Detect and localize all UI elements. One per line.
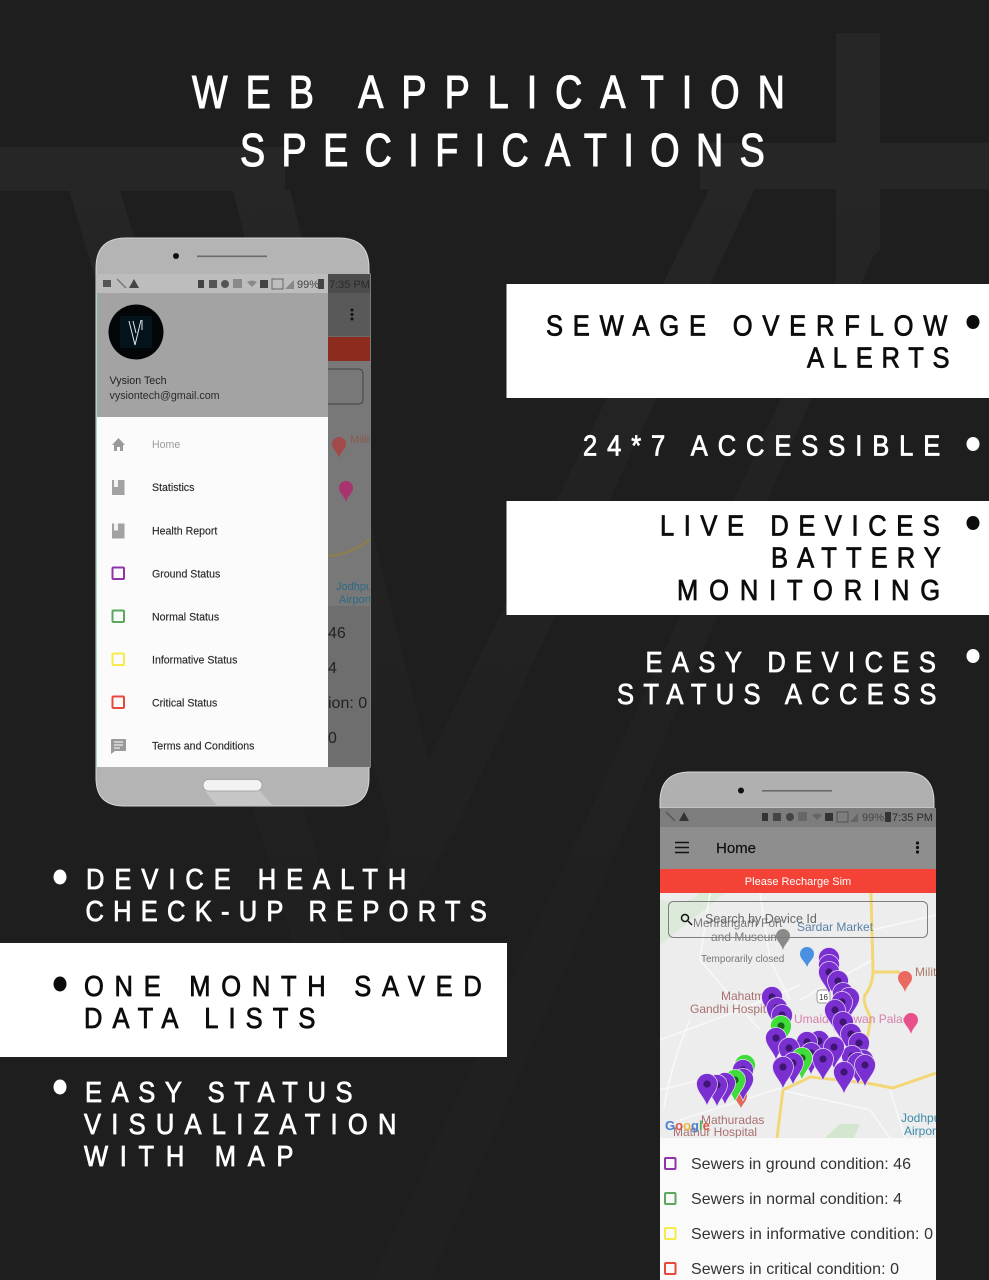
map place labels: Milit bbox=[915, 965, 937, 979]
title: WEB APPLICATION bbox=[192, 66, 785, 118]
dimmed app screen behind drawer: 7:35 PM bbox=[329, 279, 370, 291]
map place labels: Mathur Hospital bbox=[673, 1125, 757, 1139]
sewer counts panel bbox=[660, 1138, 936, 1280]
phone: home map screen bbox=[660, 772, 940, 1280]
map place labels: Jodhpu bbox=[901, 1111, 940, 1125]
recharge banner bbox=[660, 869, 936, 893]
dimmed app screen behind drawer: 0 bbox=[328, 730, 337, 747]
feature: sewage overflow alerts: SEWAGE OVERFLOW bbox=[546, 309, 947, 342]
informative status item: Informative Status bbox=[152, 654, 237, 666]
map place labels: Temporarily closed bbox=[701, 954, 784, 965]
normal status item: Normal Status bbox=[152, 612, 219, 624]
feature: live devices battery monitoring: LIVE DEVICES bbox=[660, 509, 940, 542]
map place labels: Sardar Market bbox=[797, 920, 874, 934]
normal count: Sewers in normal condition: 4 bbox=[691, 1191, 902, 1208]
map place labels bbox=[665, 916, 940, 1139]
map place labels: Mehrangarh Fort bbox=[693, 916, 783, 930]
terms item: Terms and Conditions bbox=[152, 740, 254, 752]
dimmed app screen behind drawer: Jodhpu bbox=[336, 581, 372, 593]
feature: easy status visualization with map: VISUALIZATION bbox=[84, 1107, 396, 1140]
status bar: 99% bbox=[862, 812, 884, 824]
feature: one month saved data lists bbox=[0, 943, 507, 1057]
status bar: 7:35 PM bbox=[892, 812, 933, 824]
app bar bbox=[660, 827, 936, 869]
account text bbox=[110, 375, 220, 402]
dimmed app screen behind drawer: ion: 0 bbox=[328, 695, 367, 712]
camera and speaker bbox=[738, 788, 832, 794]
app bar: Home bbox=[716, 840, 756, 857]
recharge banner: Please Recharge Sim bbox=[745, 876, 851, 888]
health report item: Health Report bbox=[152, 526, 217, 538]
informative count: Sewers in informative condition: 0 bbox=[691, 1226, 933, 1243]
menu items bbox=[111, 438, 254, 754]
search box bbox=[668, 902, 928, 938]
account text: vysiontech@gmail.com bbox=[110, 390, 220, 402]
feature: easy status visualization with map bbox=[54, 1075, 396, 1172]
critical status item: Critical Status bbox=[152, 698, 217, 710]
dimmed app screen behind drawer: 46 bbox=[328, 625, 346, 642]
home item: Home bbox=[152, 439, 180, 451]
dimmed app screen behind drawer: Milit bbox=[350, 434, 370, 446]
title bbox=[192, 66, 785, 176]
feature: easy status visualization with map: EASY STATUS bbox=[85, 1075, 353, 1108]
critical status item bbox=[112, 696, 217, 710]
feature: live devices battery monitoring: MONITORING bbox=[677, 573, 940, 606]
phone body bbox=[96, 238, 370, 806]
normal status item bbox=[112, 610, 219, 624]
home button bbox=[203, 780, 273, 806]
phone: navigation drawer bbox=[96, 238, 372, 806]
camera and speaker bbox=[173, 253, 267, 259]
map place labels: Gandhi Hospital bbox=[690, 1002, 775, 1016]
drawer header bbox=[96, 292, 328, 417]
feature: easy status visualization with map: WITH MAP bbox=[84, 1139, 293, 1172]
account text: Vysion Tech bbox=[110, 375, 167, 387]
map place labels: Mahatm bbox=[721, 989, 764, 1003]
feature: sewage overflow alerts: ALERTS bbox=[807, 341, 950, 374]
feature: easy devices status access bbox=[617, 645, 980, 710]
avatar bbox=[108, 304, 164, 360]
ground count: Sewers in ground condition: 46 bbox=[691, 1156, 911, 1173]
map bbox=[660, 893, 940, 1139]
informative status item bbox=[112, 654, 237, 666]
map place labels: and Museum bbox=[711, 930, 780, 944]
feature: easy devices status access: STATUS ACCESS bbox=[617, 677, 936, 710]
feature: device health check-up reports bbox=[54, 862, 487, 927]
critical count: Sewers in critical condition: 0 bbox=[691, 1261, 899, 1278]
map place labels: Airport bbox=[904, 1124, 940, 1138]
status bar: 99% bbox=[297, 279, 319, 291]
feature: one month saved data lists: ONE MONTH SAVED bbox=[84, 969, 482, 1002]
status bar bbox=[660, 808, 936, 827]
dimmed app screen behind drawer: Airport bbox=[339, 594, 371, 606]
health report item bbox=[112, 524, 217, 538]
home item bbox=[112, 438, 180, 451]
feature: easy devices status access: EASY DEVICES bbox=[646, 645, 936, 678]
drawer menu panel bbox=[96, 417, 328, 767]
map place labels: Umaid Bhawan Palace bbox=[794, 1012, 916, 1026]
ground status item: Ground Status bbox=[152, 568, 220, 580]
search box: Search by Device Id bbox=[705, 912, 817, 926]
feature: sewage overflow alerts bbox=[506, 284, 989, 398]
title: SPECIFICATIONS bbox=[240, 124, 765, 176]
map place labels: Mathuradas bbox=[701, 1113, 764, 1127]
statistics item bbox=[112, 480, 194, 495]
statistics item: Statistics bbox=[152, 482, 194, 494]
dimmed app screen behind drawer bbox=[328, 274, 372, 767]
dimmed app screen behind drawer: 4 bbox=[328, 660, 337, 677]
feature: 24*7 accessible: 24*7 ACCESSIBLE bbox=[583, 429, 940, 462]
feature: live devices battery monitoring: BATTERY bbox=[771, 541, 941, 574]
feature: one month saved data lists: DATA LISTS bbox=[84, 1001, 315, 1034]
map markers bbox=[696, 948, 876, 1107]
feature: device health check-up reports: DEVICE HEALTH bbox=[86, 862, 406, 895]
map: 16 bbox=[819, 993, 828, 1002]
phone body bbox=[660, 772, 934, 808]
feature: device health check-up reports: CHECK-UP REPORTS bbox=[86, 894, 487, 927]
feature: live devices battery monitoring bbox=[506, 501, 989, 615]
status bar bbox=[96, 274, 328, 293]
ground status item bbox=[112, 568, 220, 580]
terms item bbox=[111, 739, 254, 754]
map place labels: Google bbox=[665, 1118, 710, 1133]
